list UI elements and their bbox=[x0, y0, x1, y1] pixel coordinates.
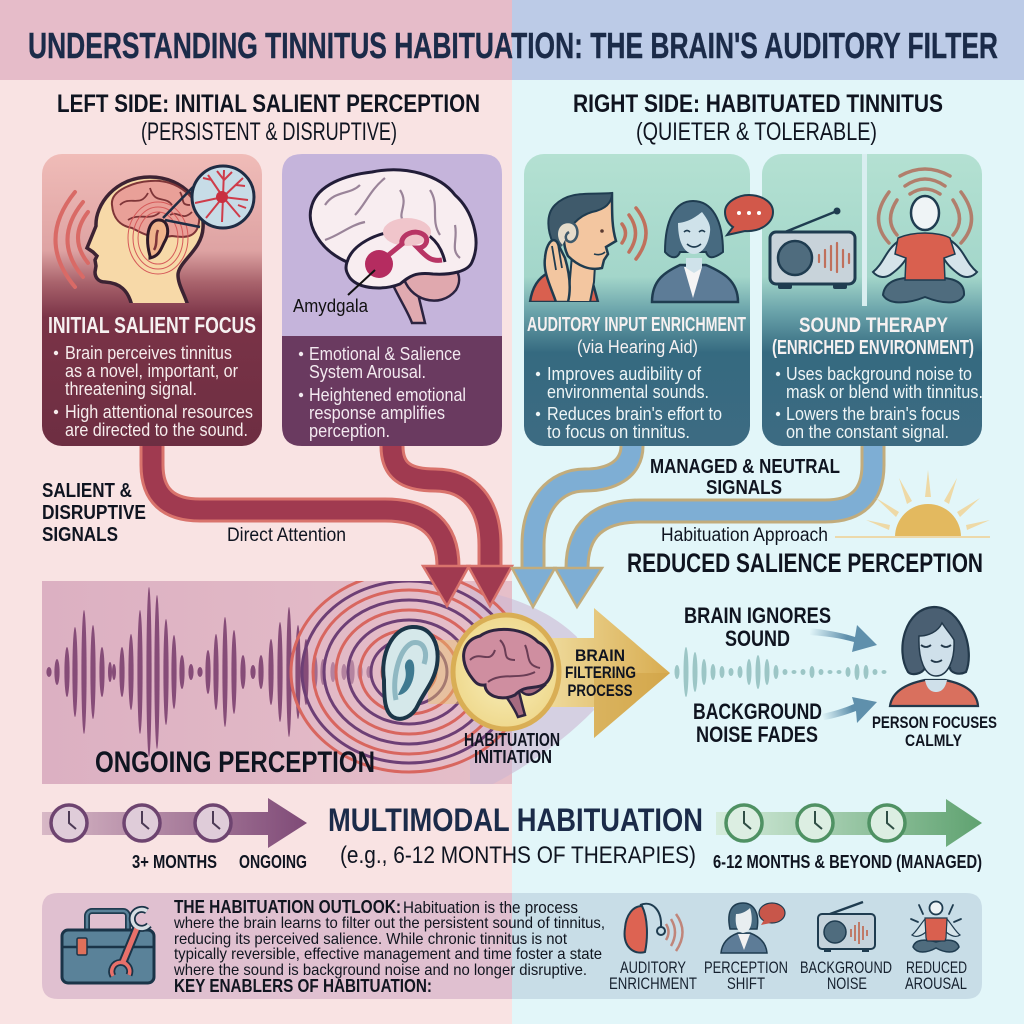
heading: left side bbox=[57, 90, 480, 146]
arrow: to person bottom bbox=[822, 697, 877, 723]
icon: sun bbox=[835, 470, 990, 537]
arrow: to person top bbox=[810, 625, 877, 652]
arrow: salient signal flow 1 bbox=[152, 446, 469, 606]
bullet list: on the constant signal. bbox=[786, 422, 949, 442]
bullet list: Heightened emotional bbox=[309, 385, 466, 405]
bullet list: Uses background noise to bbox=[786, 364, 972, 384]
icon: toolbox with wrench bbox=[62, 909, 154, 983]
label: habituation initiation: INITIATION bbox=[474, 747, 552, 767]
bullet list: are directed to the sound. bbox=[65, 420, 248, 440]
label: salient and disruptive signals bbox=[42, 480, 146, 546]
arrow: brain filtering process: FILTERING bbox=[565, 663, 636, 682]
label: amygdala: Amydgala bbox=[293, 296, 369, 316]
label: managed and neutral signals: MANAGED & NEUTRAL bbox=[650, 456, 840, 478]
bullet list: mask or blend with tinnitus. bbox=[786, 382, 983, 402]
heading: multimodal habituation bbox=[328, 802, 703, 869]
panel: auditory input enrichment bbox=[524, 154, 750, 446]
text block: habituation outlook bbox=[173, 897, 605, 996]
label: brain ignores sound bbox=[684, 603, 831, 651]
icon: radio bbox=[770, 208, 855, 289]
text block: habituation outlook: reducing its perceived salience. While chronic tinnitus is not bbox=[174, 931, 568, 948]
icon: calm person bbox=[890, 607, 978, 706]
text block: habituation outlook: THE HABITUATION OUTLOOK: bbox=[174, 897, 401, 917]
text block: habituation outlook: where the sound is background noise and no longer disruptive. bbox=[173, 962, 587, 979]
bullet list: to focus on tinnitus. bbox=[547, 422, 690, 442]
enabler: reduced arousal bbox=[905, 902, 967, 993]
enabler: background noise: BACKGROUND bbox=[800, 958, 892, 977]
bullet list: perception. bbox=[309, 421, 390, 441]
heading: left side: LEFT SIDE: INITIAL SALIENT PERCEPTION bbox=[57, 90, 480, 118]
label: brain ignores sound: BRAIN IGNORES bbox=[684, 603, 831, 628]
icon: meditating person bbox=[873, 169, 977, 302]
label: 3+ months and ongoing: 3+ MONTHS bbox=[132, 852, 217, 872]
label: background noise fades: BACKGROUND bbox=[693, 699, 822, 724]
label: brain ignores sound: SOUND bbox=[725, 626, 790, 651]
panel: initial salient focus bbox=[42, 154, 262, 446]
icon: man with hearing aid bbox=[530, 193, 616, 302]
label: background noise fades bbox=[693, 699, 822, 747]
bullet list: environmental sounds. bbox=[547, 382, 709, 402]
heading: sound therapy: SOUND THERAPY bbox=[799, 314, 948, 337]
label: salient and disruptive signals: SALIENT & bbox=[42, 480, 132, 502]
heading: right side: (QUIETER & TOLERABLE) bbox=[636, 118, 877, 146]
label: salient and disruptive signals: SIGNALS bbox=[42, 524, 118, 546]
bullet list: as a novel, important, or bbox=[65, 361, 238, 381]
icon: head with brain and neuron bbox=[56, 166, 254, 306]
icon: sound waves bbox=[622, 208, 646, 259]
bullet list: Reduces brain's effort to bbox=[547, 404, 722, 424]
heading: auditory input enrichment: AUDITORY INPUT ENRICHMENT bbox=[527, 314, 746, 336]
label: habituation initiation bbox=[464, 730, 560, 767]
chart: concentric sound rings bbox=[290, 581, 506, 774]
glow between ear and brain bbox=[428, 640, 462, 704]
heading: right side: RIGHT SIDE: HABITUATED TINNITUS bbox=[573, 90, 943, 118]
bullet list: Lowers the brain's focus bbox=[786, 404, 960, 424]
panel: ongoing perception bbox=[42, 572, 670, 784]
enabler: auditory enrichment bbox=[609, 904, 697, 993]
icon: brain with amygdala bbox=[310, 170, 476, 323]
icon: ear bbox=[383, 627, 438, 719]
timeline: left progression bbox=[42, 798, 307, 872]
icon: clocks bbox=[51, 805, 231, 841]
enabler: reduced arousal: REDUCED bbox=[906, 958, 967, 977]
heading: right side bbox=[573, 90, 943, 146]
bullet list: Improves audibility of bbox=[547, 364, 702, 384]
arrow: brain filtering process: PROCESS bbox=[568, 681, 632, 700]
chart: calm waveform bbox=[674, 647, 886, 697]
label: habituation approach: Habituation Approach bbox=[661, 525, 828, 546]
bullet list bbox=[776, 364, 983, 442]
enabler: auditory enrichment: ENRICHMENT bbox=[609, 974, 697, 993]
icon: woman speaking bbox=[652, 201, 738, 302]
bullet list: High attentional resources bbox=[65, 402, 253, 422]
label: person focuses calmly: CALMLY bbox=[905, 731, 963, 750]
icon: clocks bbox=[726, 805, 905, 841]
heading: initial salient focus: INITIAL SALIENT FOCUS bbox=[48, 312, 256, 338]
text block: habituation outlook: typically reversible, effective management and time foster a state bbox=[174, 946, 602, 963]
enabler: reduced arousal: AROUSAL bbox=[905, 974, 967, 993]
label: direct attention: Direct Attention bbox=[227, 525, 346, 546]
arrow: managed signal flow 1 bbox=[512, 446, 632, 607]
icon: speech bubble bbox=[725, 195, 773, 235]
label: managed and neutral signals bbox=[650, 456, 840, 499]
panel: sound therapy bbox=[762, 154, 983, 446]
enabler: background noise: NOISE bbox=[827, 974, 867, 993]
arrow: brain filtering process: BRAIN bbox=[575, 646, 625, 665]
heading: left side: (PERSISTENT & DISRUPTIVE) bbox=[141, 118, 397, 146]
text block: habituation outlook: KEY ENABLERS OF HABITUATION: bbox=[174, 976, 432, 996]
heading: multimodal habituation: MULTIMODAL HABITUATION bbox=[328, 802, 703, 838]
icon: brain in golden circle bbox=[453, 615, 559, 729]
subheading: via hearing aid: (via Hearing Aid) bbox=[577, 337, 698, 357]
label: salient and disruptive signals: DISRUPTIVE bbox=[42, 502, 146, 524]
text block: habituation outlook: Habituation is the process bbox=[403, 898, 578, 917]
timeline: right progression bbox=[713, 799, 982, 872]
label: background noise fades: NOISE FADES bbox=[696, 722, 818, 747]
panel: emotional salience bbox=[282, 154, 502, 446]
arrow: salient signal flow 2 bbox=[392, 446, 512, 606]
label: habituation initiation: HABITUATION bbox=[464, 730, 560, 750]
bullet list: Brain perceives tinnitus bbox=[65, 343, 232, 363]
text block: habituation outlook: where the brain learns to filter out the persistent sound of tinnitus, bbox=[173, 915, 605, 932]
label: 3+ months and ongoing: ONGOING bbox=[239, 852, 307, 872]
heading: multimodal habituation: (e.g., 6-12 MONTHS OF THERAPIES) bbox=[340, 842, 696, 869]
chart: tinnitus waveform bbox=[46, 587, 372, 757]
enabler: perception shift bbox=[704, 903, 788, 993]
bullet list bbox=[299, 344, 466, 441]
enabler: perception shift: SHIFT bbox=[727, 974, 765, 993]
label: 3+ months and ongoing bbox=[132, 852, 307, 872]
bullet list: threatening signal. bbox=[65, 379, 197, 399]
bullet list: Emotional & Salience bbox=[309, 344, 461, 364]
enabler: auditory enrichment: AUDITORY bbox=[620, 958, 686, 977]
bullet list bbox=[54, 343, 253, 440]
label: person focuses calmly bbox=[872, 713, 997, 750]
enabler: perception shift: PERCEPTION bbox=[704, 958, 788, 977]
arrow: brain filtering process bbox=[540, 608, 670, 738]
label: managed and neutral signals: SIGNALS bbox=[706, 477, 782, 499]
panel: habituation outlook bbox=[42, 893, 982, 999]
bullet list: System Arousal. bbox=[309, 362, 426, 382]
bullet list: response amplifies bbox=[309, 403, 445, 423]
heading: ongoing perception: ONGOING PERCEPTION bbox=[95, 746, 375, 779]
bullet list bbox=[536, 364, 722, 442]
enabler: background noise bbox=[800, 902, 892, 993]
arrow: managed signal flow 2 bbox=[555, 446, 873, 607]
